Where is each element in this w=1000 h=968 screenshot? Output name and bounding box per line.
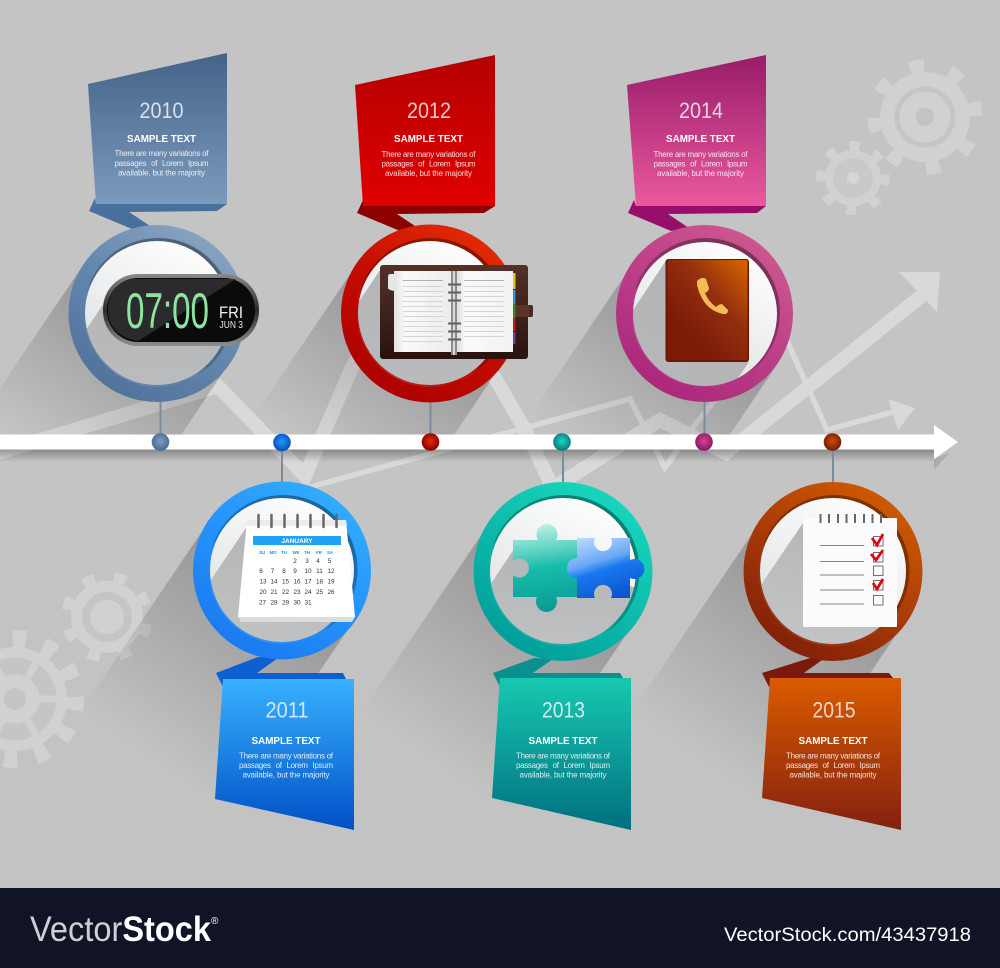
gear: large lower left: [0, 637, 77, 761]
date numbers: 19: [327, 578, 335, 586]
ring: [474, 482, 652, 661]
banner text: 2012: [407, 98, 451, 123]
date numbers: 24: [304, 589, 312, 596]
banner text: passages of Lorem Ipsum: [382, 160, 476, 168]
connector stem: [832, 448, 834, 484]
footer band: [0, 888, 1000, 968]
weekday labels: TU: [281, 550, 287, 555]
connector stem: [160, 400, 162, 436]
banner text: SAMPLE TEXT: [127, 133, 197, 145]
banner text: [114, 98, 209, 178]
icon: digital clock: FRI: [219, 303, 243, 322]
banner tail: [216, 657, 346, 687]
ring: [341, 224, 506, 402]
timeline dot: [553, 433, 571, 451]
banner text: 2013: [542, 698, 585, 722]
long shadow: 2011: [80, 521, 355, 810]
date numbers: 31: [304, 600, 312, 606]
banner: [215, 679, 354, 830]
banner text: There are many variations of: [114, 149, 209, 158]
panel: 2013: [474, 433, 652, 830]
banner: [88, 53, 227, 204]
banner text: available, but the majority: [657, 169, 744, 178]
timeline dot: [695, 433, 713, 451]
weekday labels: SA: [327, 550, 334, 555]
banner: [627, 55, 766, 206]
banner text: [654, 98, 748, 178]
date numbers: 15: [282, 578, 289, 586]
date numbers: 10: [304, 568, 312, 575]
banner text: SAMPLE TEXT: [394, 133, 464, 145]
icon: notebook: [380, 265, 533, 359]
date numbers: 12: [327, 568, 335, 575]
date numbers: 14: [270, 578, 278, 586]
panel: 2010: [68, 53, 259, 451]
banner text: 2015: [812, 698, 856, 722]
banner text: 2010: [140, 98, 184, 123]
icon: digital clock: JUN 3: [220, 320, 243, 331]
date numbers: 28: [270, 600, 278, 606]
banner text: SAMPLE TEXT: [528, 735, 598, 747]
banner text: There are many variations of: [239, 752, 334, 760]
date numbers: 5: [328, 558, 332, 565]
banner text: SAMPLE TEXT: [798, 735, 868, 747]
connector stem: [281, 448, 283, 484]
footer logo: VectorStock: [30, 910, 211, 949]
panel: 2015: [744, 433, 922, 830]
date numbers: 6: [259, 568, 263, 575]
timeline dot: [273, 434, 291, 451]
weekday labels: MO: [269, 550, 277, 555]
banner text: available, but the majority: [242, 770, 330, 780]
registered mark: ®: [211, 916, 219, 927]
date numbers: 13: [259, 578, 267, 586]
weekday labels: [259, 550, 334, 555]
date numbers: [259, 558, 335, 606]
banner text: [382, 98, 476, 178]
banner text: SAMPLE TEXT: [252, 735, 321, 747]
date numbers: 26: [327, 589, 335, 596]
banner text: available, but the majority: [520, 770, 606, 780]
date numbers: 17: [304, 578, 312, 586]
banner text: [786, 698, 881, 780]
long shadow: 2012: [274, 274, 494, 434]
background arrow: thick zigzag: [0, 272, 940, 488]
panel: 2011: [193, 434, 371, 830]
date numbers: 20: [259, 589, 267, 596]
date numbers: 25: [316, 589, 323, 596]
banner text: [516, 698, 611, 780]
ring: [68, 225, 241, 402]
panel: 2012: [341, 55, 533, 451]
banner text: There are many variations of: [786, 752, 881, 760]
long shadow: 2015: [631, 522, 906, 811]
timeline dot: [152, 433, 169, 451]
banner text: 2014: [679, 98, 723, 123]
banner text: available, but the majority: [790, 770, 876, 780]
long shadow: 2010: [2, 270, 224, 434]
panel: 2014: [616, 55, 793, 451]
date numbers: 11: [316, 568, 323, 575]
date numbers: 21: [270, 589, 278, 596]
date numbers: 27: [259, 600, 266, 606]
background arrow: thin zigzag: [310, 330, 915, 487]
icon: checklist: [803, 514, 897, 627]
banner text: SAMPLE TEXT: [666, 133, 736, 145]
weekday labels: SU: [259, 550, 265, 555]
banner tail: [628, 200, 766, 231]
icon: address book: [666, 259, 749, 362]
banner text: There are many variations of: [516, 752, 611, 760]
banner tail: [493, 658, 623, 687]
connector stem: [562, 448, 564, 484]
icon: digital clock: [103, 274, 259, 346]
icon: calendar: JANUARY: [281, 538, 313, 545]
weekday labels: WE: [292, 550, 300, 555]
banner: [355, 55, 495, 206]
banner text: available, but the majority: [385, 169, 472, 178]
timeline arrow: [0, 425, 958, 470]
long shadow: 2013: [361, 522, 636, 811]
icon: calendar: [238, 515, 355, 622]
date numbers: 16: [293, 578, 301, 586]
date numbers: 4: [316, 558, 320, 565]
weekday labels: FR: [316, 550, 323, 555]
date numbers: 18: [316, 578, 323, 586]
icon: puzzle pieces: [513, 524, 644, 612]
footer image id: VectorStock.com/43437918: [724, 925, 971, 946]
date numbers: 8: [282, 568, 286, 575]
date numbers: 2: [293, 558, 297, 565]
banner text: There are many variations of: [382, 150, 476, 159]
date numbers: 23: [293, 589, 301, 596]
banner text: passages of Lorem Ipsum: [654, 160, 748, 168]
date numbers: 30: [293, 600, 301, 606]
date numbers: 22: [282, 589, 289, 596]
banner tail: [762, 658, 893, 687]
ring: [616, 225, 793, 402]
banner text: passages of Lorem Ipsum: [516, 761, 610, 770]
banner tail: [357, 200, 495, 231]
banner text: passages of Lorem Ipsum: [786, 761, 880, 770]
connector stem: [704, 400, 706, 436]
banner: [492, 678, 631, 830]
banner text: 2011: [266, 698, 308, 722]
weekday labels: TH: [304, 550, 310, 555]
gear: small upper right: [818, 143, 888, 213]
gear: large upper right: [861, 53, 989, 181]
date numbers: 3: [305, 558, 309, 565]
banner text: passages of Lorem Ipsum: [239, 761, 333, 770]
date numbers: 9: [293, 568, 297, 575]
ring: [193, 482, 371, 660]
banner text: There are many variations of: [654, 150, 748, 159]
timeline dot: [422, 433, 439, 451]
icon: digital clock: 07:00: [126, 283, 209, 339]
banner tail: [89, 198, 227, 229]
date numbers: 7: [271, 568, 275, 575]
ring: [744, 482, 922, 661]
date numbers: 29: [282, 600, 289, 606]
long shadow: 2014: [550, 277, 778, 434]
banner text: passages of Lorem Ipsum: [114, 159, 209, 168]
banner text: [239, 698, 334, 780]
gear: small lower left: [51, 561, 163, 673]
banner: [762, 678, 901, 830]
connector stem: [430, 400, 432, 436]
banner text: available, but the majority: [118, 168, 205, 178]
timeline dot: [824, 433, 841, 451]
